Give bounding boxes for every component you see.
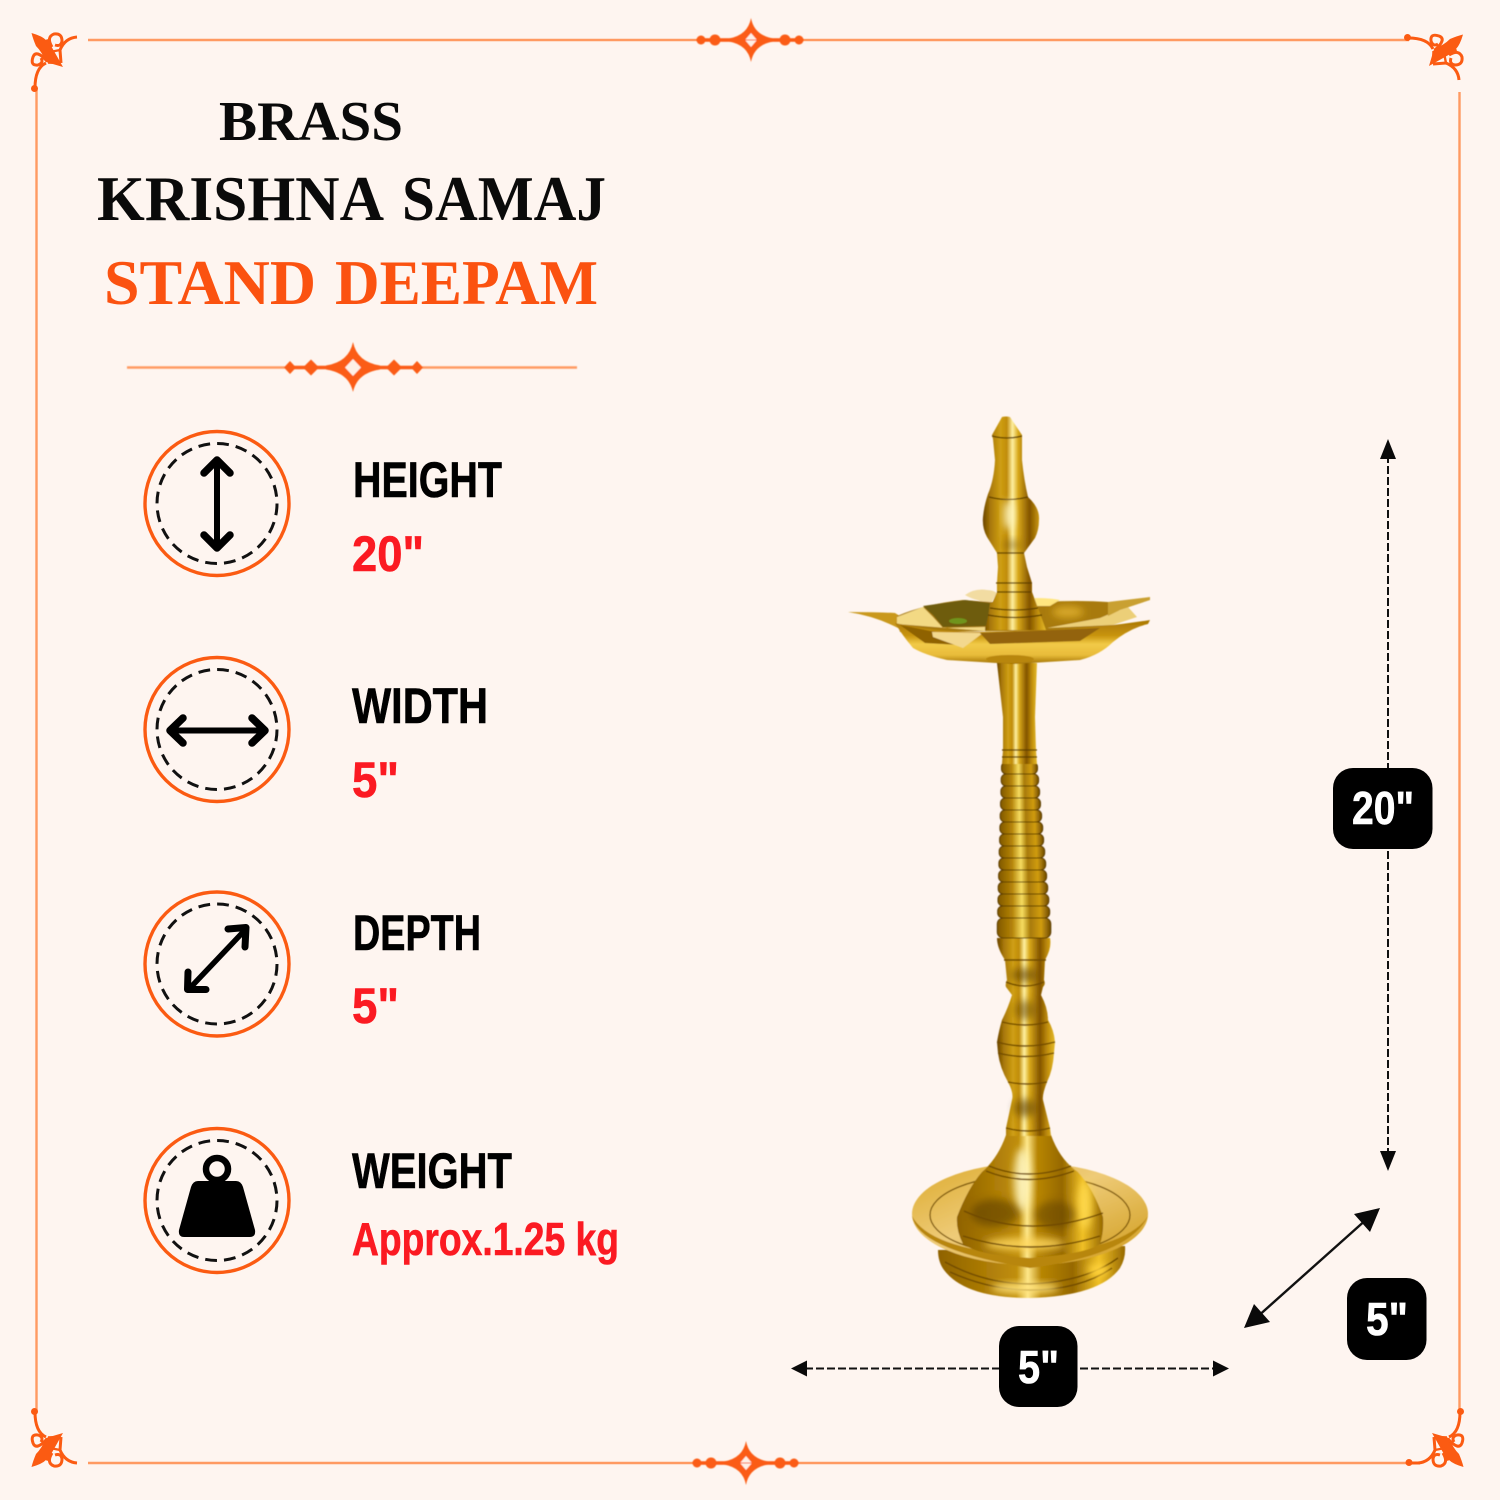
title: SAMAJ [402,164,606,234]
title: DEEPAM [335,248,598,318]
ornament: top left corner [31,33,77,92]
value: depth: 5" [352,978,399,1034]
title: BRASS [219,91,403,153]
dimension: width [791,1326,1229,1407]
title: STAND [104,248,316,318]
label: weight: WEIGHT [352,1143,512,1199]
spec: weight [145,1128,619,1272]
lamp foot [938,1246,1125,1298]
lamp base plate [912,1163,1148,1268]
icon: width arrow [145,658,289,802]
label: height: HEIGHT [353,452,502,508]
ornament: bottom right corner [1406,1408,1464,1467]
title: KRISHNA [97,164,384,234]
ornament: top right corner [1404,34,1463,80]
ornament: bottom left corner [31,1408,77,1467]
icon: height arrow [145,432,289,576]
label: depth: DEPTH [353,905,481,961]
icon: depth arrow [145,892,289,1036]
ornament: top centre [696,18,804,62]
label: width: WIDTH [352,678,488,734]
brass deepam lamp [848,416,1150,1298]
lamp finial [983,416,1046,630]
value: weight: Approx.1.25 kg [352,1213,619,1265]
title [97,91,606,318]
lamp bowl [848,590,1150,664]
lamp upper shaft [997,663,1037,764]
heading divider ornament [127,342,577,392]
icon: weight [145,1128,289,1272]
badge: width: 5" [1018,1341,1059,1393]
lamp bell [957,1135,1103,1258]
value: width: 5" [352,752,399,808]
badge: height: 20" [1352,782,1414,834]
spec: height [145,432,502,582]
badge: depth [1347,1278,1426,1360]
dimension: depth [1244,1208,1426,1360]
value: height: 20" [352,526,424,582]
lamp lower stem [997,938,1055,1136]
badge: height [1333,768,1432,849]
spec: depth [145,892,481,1036]
ornament: bottom centre [692,1441,798,1485]
badge: width [999,1326,1078,1407]
badge: depth: 5" [1366,1293,1408,1345]
spec: width [145,658,488,808]
dimension: height [1333,439,1432,1171]
lamp ribbed stem [997,762,1051,938]
